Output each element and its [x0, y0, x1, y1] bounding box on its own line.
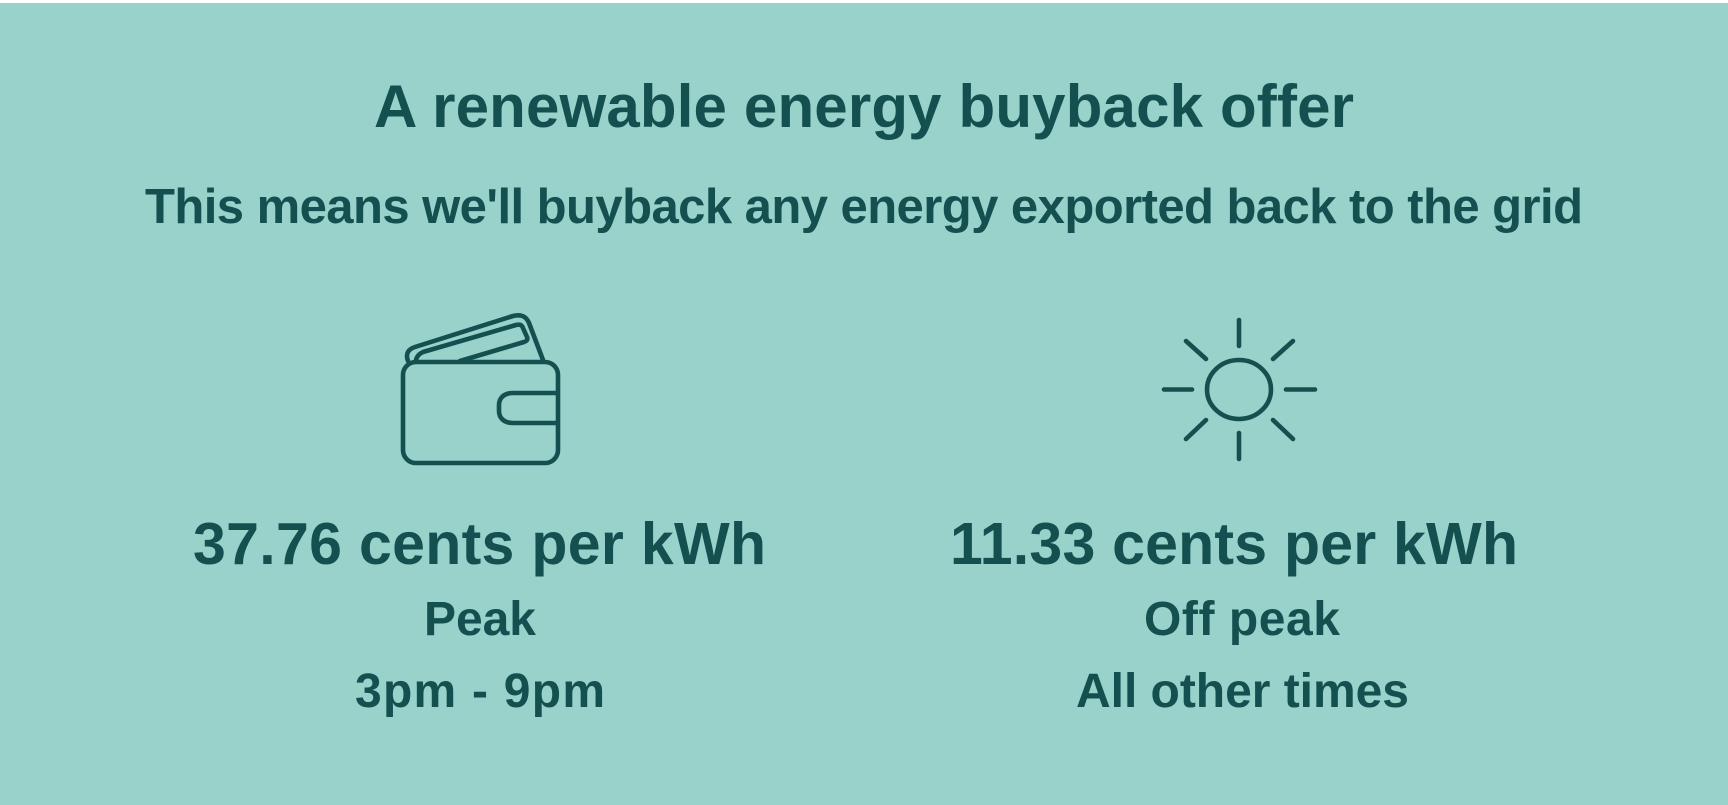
peak label: Peak — [424, 593, 536, 646]
subtitle: This means we'll buyback any energy exported back to the grid — [145, 180, 1583, 234]
icon: sun — [1164, 320, 1315, 459]
title: A renewable energy buyback offer — [374, 73, 1354, 140]
peak hours: 3pm - 9pm — [355, 665, 605, 718]
off peak label: Off peak — [1144, 593, 1340, 646]
panel: off peak rate — [950, 320, 1518, 718]
peak price: 37.76 cents per kWh — [193, 511, 766, 577]
icon: wallet — [403, 315, 558, 463]
off peak price: 11.33 cents per kWh — [950, 511, 1518, 577]
panel: peak rate — [193, 315, 766, 718]
off peak hours: All other times — [1076, 665, 1409, 718]
